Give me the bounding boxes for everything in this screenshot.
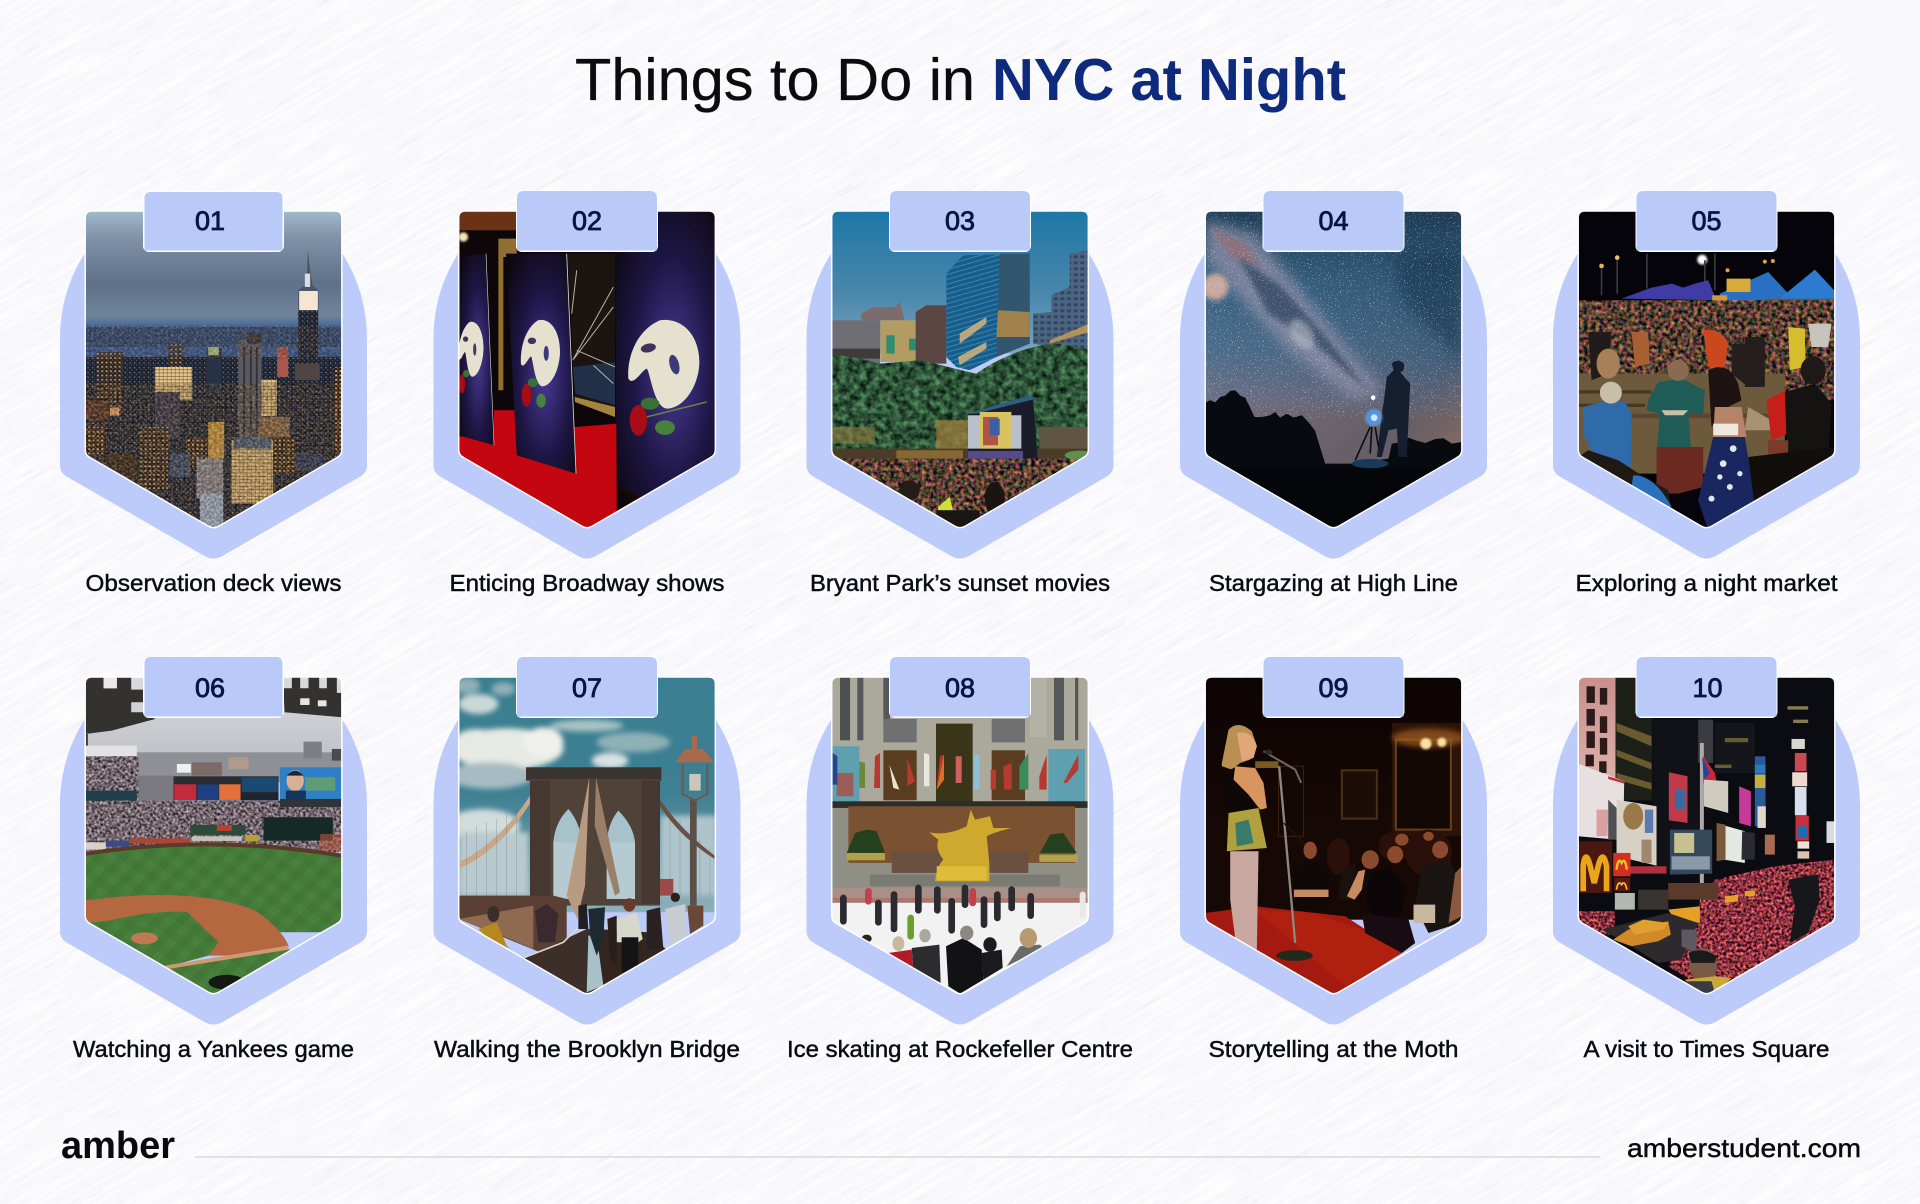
number tab	[143, 657, 284, 718]
title: Things to Do in	[575, 47, 975, 113]
number tab	[1636, 191, 1778, 252]
panel: card 04 stargazing	[1180, 191, 1487, 596]
number tab	[143, 191, 284, 252]
number tab: 04	[1318, 206, 1349, 236]
photo: Times Square billboards and crowd	[1575, 673, 1842, 1000]
caption: Enticing Broadway shows	[450, 570, 724, 596]
number tab: 07	[572, 673, 602, 703]
panel: card 08 Rockefeller ice rink	[787, 657, 1133, 1062]
arched backing shape	[434, 245, 740, 558]
panel: card 10 Times Square	[1553, 657, 1860, 1062]
number tab: 10	[1692, 673, 1723, 703]
caption: A visit to Times Square	[1584, 1036, 1830, 1062]
arched backing shape	[1180, 245, 1487, 558]
caption: Watching a Yankees game	[73, 1036, 354, 1062]
caption: Exploring a night market	[1576, 570, 1838, 596]
number tab: 09	[1318, 673, 1349, 703]
arched backing shape	[806, 245, 1114, 558]
title	[575, 47, 1346, 113]
number tab	[889, 191, 1031, 252]
panel: card 06 Yankees game	[60, 657, 367, 1062]
caption: Bryant Park’s sunset movies	[810, 570, 1110, 596]
number tab	[516, 657, 658, 718]
number tab: 03	[945, 206, 975, 236]
arched backing shape	[1553, 711, 1860, 1024]
photo: crowded night market with blue tents	[1575, 207, 1842, 534]
panel: card 07 Brooklyn Bridge	[434, 657, 740, 1062]
footer website: amberstudent.com	[1627, 1133, 1861, 1163]
panel: card 09 Moth storytelling	[1180, 657, 1487, 1062]
number tab	[1262, 657, 1404, 718]
number tab: 01	[195, 206, 225, 236]
panel: card 02 Broadway	[434, 191, 740, 596]
photo: midtown skyline at dusk	[83, 207, 347, 530]
number tab	[516, 191, 658, 252]
panel: card 03 Bryant Park	[806, 191, 1114, 596]
title: NYC at Night	[992, 47, 1346, 113]
photo: storyteller on stage with audience	[1202, 673, 1469, 995]
photo: Milky Way with stargazer silhouette	[1202, 207, 1469, 534]
caption: Walking the Brooklyn Bridge	[434, 1036, 740, 1062]
number tab	[1636, 657, 1778, 718]
caption: Observation deck views	[86, 570, 342, 596]
number tab	[889, 657, 1031, 718]
arched backing shape	[60, 711, 367, 1024]
caption: Storytelling at the Moth	[1208, 1036, 1459, 1062]
footer logo: amber: amber	[61, 1125, 175, 1167]
caption: Ice skating at Rockefeller Centre	[787, 1036, 1133, 1062]
number tab: 06	[195, 673, 225, 703]
panel: card 01 observation deck	[60, 191, 367, 596]
arched backing shape	[806, 711, 1114, 1024]
number tab	[1262, 191, 1404, 252]
arched backing shape	[1553, 245, 1860, 558]
caption: Stargazing at High Line	[1209, 570, 1458, 596]
photo: Bryant Park outdoor movie screen	[826, 207, 1095, 530]
panel: card 05 night market	[1553, 191, 1860, 596]
arched backing shape	[434, 711, 740, 1024]
arched backing shape	[60, 245, 367, 558]
arched backing shape	[1180, 711, 1487, 1024]
photo: Phantom of the Opera banners on red carpet	[457, 207, 720, 530]
photo: Rockefeller Centre rink with golden statue	[830, 673, 1093, 1000]
number tab: 08	[945, 673, 975, 703]
photo: Brooklyn Bridge tower and walkway	[458, 676, 716, 994]
number tab: 05	[1691, 206, 1722, 236]
number tab: 02	[572, 206, 602, 236]
photo: Yankee Stadium field and scoreboard	[82, 672, 349, 999]
